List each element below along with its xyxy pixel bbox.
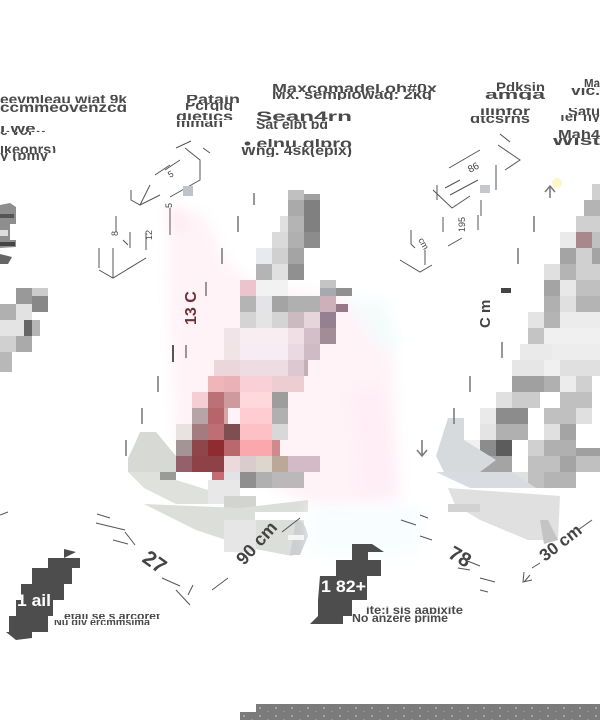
top middle left text bbox=[176, 91, 240, 130]
badge right caption bbox=[352, 603, 463, 625]
far right text: fer ny bbox=[560, 108, 600, 124]
bottom grey bar bbox=[240, 704, 600, 720]
height label left: 13 C bbox=[183, 291, 200, 325]
length number: 27 bbox=[138, 546, 170, 578]
badge left caption: etall se s arcoret bbox=[64, 609, 160, 623]
top left text block: lkeonrs) bbox=[0, 141, 56, 157]
top middle left text: Pcrqlq bbox=[185, 97, 233, 113]
box dims left: 8 bbox=[110, 231, 120, 236]
far right text bbox=[552, 75, 600, 148]
badge right caption: No anzere prime bbox=[352, 611, 448, 625]
box dims left: 5 bbox=[166, 169, 175, 180]
far right text: vic. bbox=[571, 82, 600, 98]
mint right fade of left horse bbox=[310, 505, 420, 555]
pink rocking horse body bbox=[168, 205, 400, 510]
grey rocker right bbox=[436, 418, 560, 544]
far right text: Wist bbox=[552, 132, 600, 148]
box diagram left bbox=[99, 141, 210, 278]
box dims right: 86 bbox=[466, 161, 482, 176]
width dimension left bbox=[212, 517, 300, 590]
central horse mosaic bbox=[240, 190, 352, 344]
top middle text: Sat elbt bq bbox=[256, 116, 328, 132]
box dims left bbox=[110, 169, 175, 240]
box dims left: 12 bbox=[144, 230, 154, 240]
badge right caption: ite:i sis aapjxite bbox=[366, 603, 463, 617]
height stem mark left bbox=[172, 345, 174, 362]
badge left bbox=[6, 549, 80, 640]
top middle text: Sean4rn bbox=[256, 108, 352, 124]
top middle left text: dietics bbox=[176, 108, 233, 124]
width dimension right bbox=[523, 520, 592, 582]
box grey tag right bbox=[480, 185, 490, 193]
width dimension right: 30 cm bbox=[536, 521, 585, 565]
height tick right bbox=[501, 288, 511, 293]
badge right bbox=[310, 544, 384, 624]
top left text block: e vol bbox=[0, 122, 32, 138]
top left text block bbox=[0, 91, 127, 163]
top right text: Pdksin bbox=[496, 79, 545, 95]
top middle text: • elnu.qlpro bbox=[244, 135, 352, 151]
top left text block: i.wé.. bbox=[0, 120, 46, 136]
top right text: ilinfor bbox=[480, 103, 531, 119]
green rocker left bbox=[128, 432, 308, 556]
top middle left text: mman bbox=[176, 114, 223, 130]
bottom left dimension length bbox=[0, 512, 193, 605]
far right text: Satu bbox=[568, 103, 600, 119]
top middle text: Wng. 4sk(epix) bbox=[241, 142, 352, 158]
top middle text: Maxcomadel.oh#0x bbox=[272, 80, 437, 96]
box dims right: cm bbox=[416, 236, 431, 251]
box dims left: 5 bbox=[164, 203, 174, 208]
top left text block: y (bmy bbox=[0, 147, 48, 163]
arrow highlight bbox=[552, 178, 562, 188]
grey horse right bbox=[464, 184, 600, 488]
top right text: amga bbox=[485, 86, 545, 102]
top left text block: eevmleau wiat 9k bbox=[0, 91, 127, 107]
badge left caption bbox=[54, 609, 160, 629]
height line left bbox=[126, 193, 254, 456]
box diagram right bbox=[400, 134, 520, 272]
width dimension left: 90 cm bbox=[232, 517, 281, 569]
badge right: 1 82+ bbox=[321, 577, 366, 596]
height line right with arrows bbox=[417, 186, 555, 456]
top middle text bbox=[241, 80, 437, 158]
box dims right bbox=[416, 161, 482, 251]
top right text bbox=[470, 79, 545, 126]
top middle text: Mx. semplowag: 2kg bbox=[272, 86, 432, 102]
left horse head fragment bbox=[0, 203, 48, 372]
top left text block: ccmmeovenzcq bbox=[0, 99, 127, 115]
box dims right: 195 bbox=[457, 217, 467, 232]
badge left: 1 ail bbox=[17, 591, 51, 610]
top middle left text: Patain bbox=[186, 91, 240, 107]
bottom right length dimension: 78 bbox=[444, 542, 475, 572]
bottom right length dimension bbox=[401, 515, 495, 592]
box grey tag left bbox=[183, 186, 193, 196]
height label right: C m bbox=[477, 300, 494, 328]
far right text: Mah4 bbox=[558, 126, 600, 142]
top right text: dtcsrns bbox=[470, 110, 530, 126]
